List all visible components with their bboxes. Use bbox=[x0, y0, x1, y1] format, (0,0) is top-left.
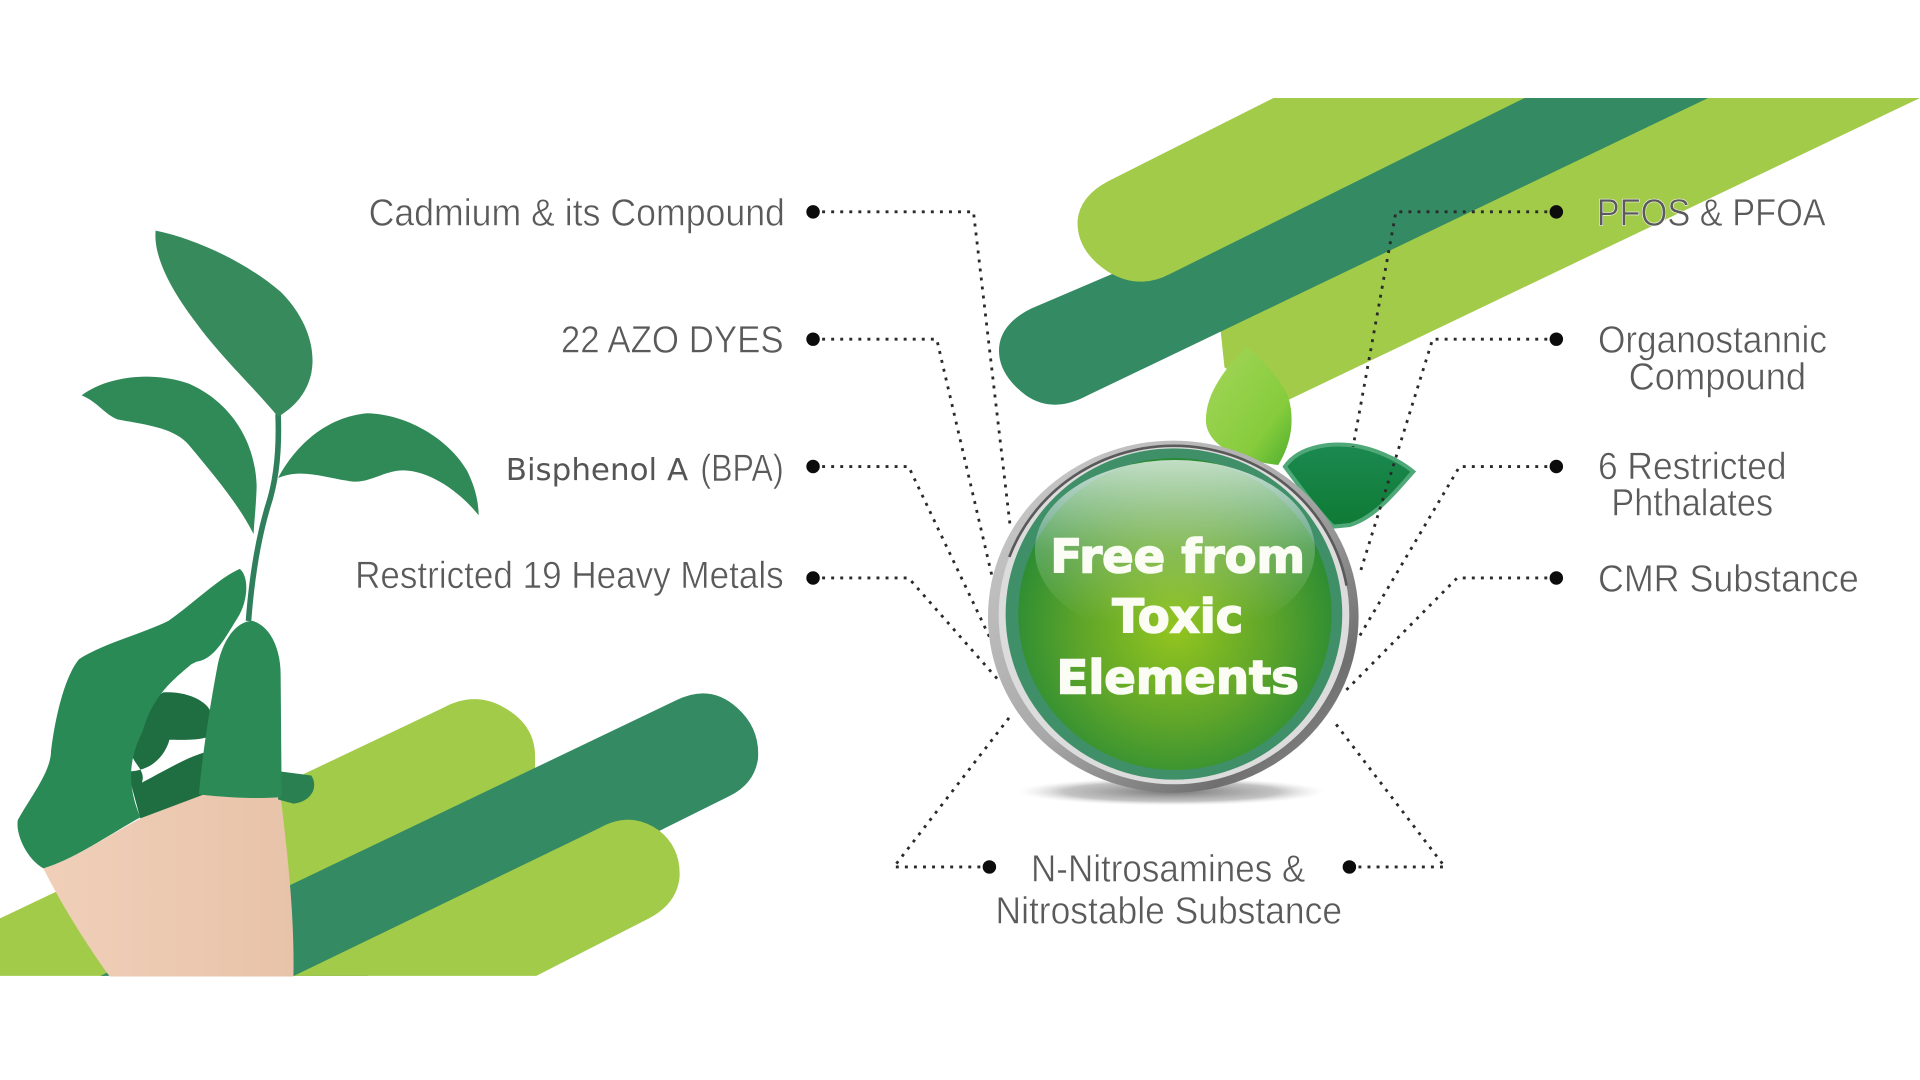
front finger bbox=[199, 621, 282, 798]
label: N-Nitrosamines and Nitrostable Substance: Nitrostable Substance bbox=[996, 890, 1342, 932]
label: Restricted 19 Heavy Metals: Restricted 19 Heavy Metals bbox=[355, 555, 784, 597]
green ring bbox=[1006, 448, 1342, 780]
central badge bbox=[988, 347, 1413, 806]
top leaf bbox=[155, 231, 313, 417]
label: N-Nitrosamines and Nitrostable Substance: N-Nitrosamines & bbox=[1031, 849, 1305, 891]
label: PFOS and PFOA: PFOS & PFOA bbox=[1597, 192, 1826, 234]
label: 6 Restricted Phthalates: 6 Restricted bbox=[1598, 446, 1787, 488]
label: Organostannic Compound: Compound bbox=[1629, 356, 1806, 398]
right leaf bbox=[278, 413, 479, 515]
label: 6 Restricted Phthalates: Phthalates bbox=[1611, 483, 1773, 525]
bottom-left diagonal bands bbox=[0, 693, 758, 976]
label: N-Nitrosamines and Nitrostable Substance bbox=[996, 849, 1342, 932]
badge title: Free from bbox=[1050, 529, 1305, 583]
hand holding plant bbox=[17, 231, 479, 977]
silver rim bbox=[988, 441, 1359, 793]
thumb tip bbox=[278, 771, 314, 804]
connector lines: right side bbox=[1335, 467, 1556, 867]
label: Cadmium: Cadmium & its Compound bbox=[369, 192, 785, 234]
connector lines: upper right bbox=[1353, 212, 1556, 576]
label: Organostannic Compound: Organostannic bbox=[1598, 320, 1827, 362]
label: CMR Substance: CMR Substance bbox=[1598, 558, 1859, 600]
label: Bisphenol A bbox=[506, 448, 784, 490]
label: Bisphenol A: (BPA) bbox=[700, 448, 784, 490]
badge title: Elements bbox=[1057, 651, 1299, 705]
label: Bisphenol A: Bisphenol A bbox=[506, 453, 688, 488]
left leaf bbox=[82, 377, 257, 534]
label: 22 AZO DYES: 22 AZO DYES bbox=[561, 320, 784, 362]
label: Organostannic Compound bbox=[1598, 320, 1827, 398]
label: 6 Restricted Phthalates bbox=[1598, 446, 1787, 525]
stem bbox=[248, 414, 278, 621]
connector lines: left side bbox=[813, 212, 1010, 867]
badge title: Toxic bbox=[1112, 589, 1243, 643]
shadow bbox=[1018, 778, 1325, 806]
bullet dots bbox=[806, 205, 1563, 874]
dark rim arc bbox=[1009, 446, 1347, 586]
gloss highlight bbox=[1035, 460, 1315, 640]
glossy disc bbox=[1018, 458, 1332, 770]
dark inner fingers bbox=[128, 692, 212, 818]
icon: light green leaf bbox=[1206, 347, 1292, 465]
index finger and palm bbox=[17, 569, 246, 868]
rim highlight bbox=[999, 446, 1349, 784]
hand skin bbox=[43, 792, 294, 977]
icon: dark green leaf bbox=[1285, 445, 1413, 527]
badge title bbox=[1050, 529, 1305, 705]
top-right diagonal bands bbox=[999, 98, 1920, 405]
